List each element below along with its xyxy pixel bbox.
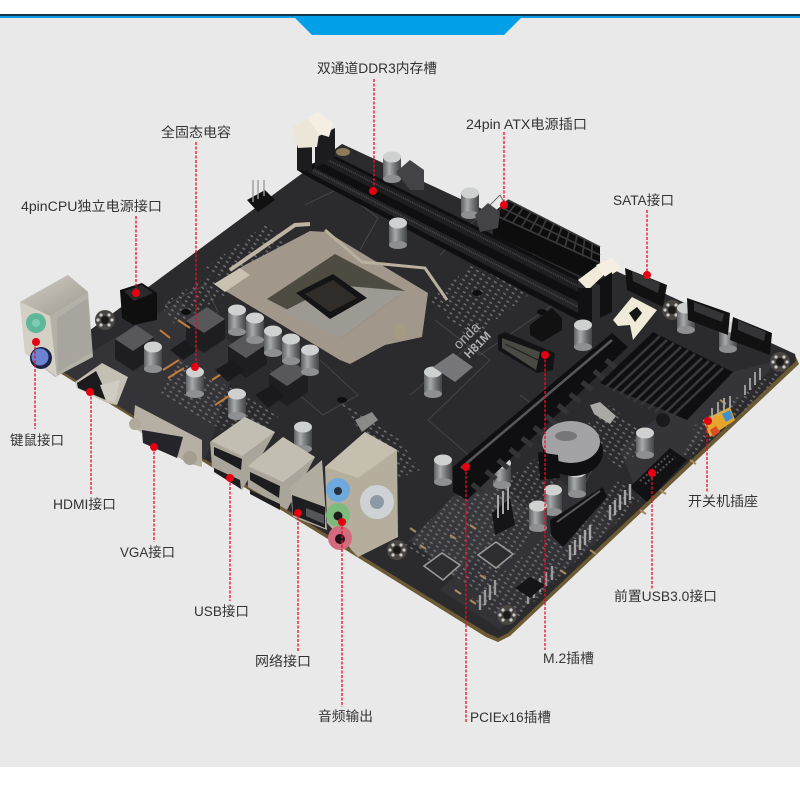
callout: audio output: 音频输出 — [318, 708, 373, 724]
chipset marking: H81M — [461, 329, 494, 361]
4-pin CPU power connector — [120, 283, 157, 325]
callout: 24pin ATX power: 24pin ATX电源插口 — [466, 117, 587, 132]
callout: USB: USB接口 — [194, 603, 249, 619]
callout: SATA: SATA接口 — [613, 192, 674, 208]
fan header pins — [247, 180, 275, 212]
small header connectors — [492, 308, 562, 535]
SATA connectors — [625, 268, 772, 355]
PCIe latch — [613, 297, 657, 340]
callout: 4pin CPU power — [21, 198, 162, 297]
callout: 24pin ATX power — [466, 117, 587, 209]
callout: power switch header: 开关机插座 — [688, 494, 758, 509]
callout: front USB3.0: 前置USB3.0接口 — [614, 588, 717, 604]
callout: M.2 slot — [541, 351, 594, 666]
VGA port — [129, 405, 202, 467]
USB ports — [210, 417, 315, 510]
chipset marking — [433, 319, 494, 382]
audio and super IO chips — [410, 400, 726, 604]
callout: HDMI — [53, 388, 116, 512]
PCIe x1 slot — [550, 487, 607, 547]
pin headers — [480, 368, 760, 610]
callout: PCIe x16 slot — [462, 463, 551, 725]
callout: power switch header — [688, 417, 758, 509]
callout: VGA — [120, 443, 175, 560]
callout: 4pin CPU power: 4pinCPU独立电源接口 — [21, 198, 162, 214]
CPU socket — [214, 224, 447, 364]
power switch header — [703, 396, 735, 437]
callout: audio output — [318, 518, 373, 724]
callout: keyboard and mouse: 键鼠接口 — [10, 432, 64, 448]
callout: dual-channel DDR3 slots: 双通道DDR3内存槽 — [317, 61, 437, 76]
callout: PCIe x16 slot: PCIEx16插槽 — [470, 710, 551, 725]
callout: USB — [194, 474, 249, 619]
callout: network: 网络接口 — [255, 653, 311, 669]
crystal oscillator — [590, 402, 616, 424]
front USB3.0 header — [630, 448, 687, 502]
HDMI port — [75, 363, 128, 405]
callout: dual-channel DDR3 slots — [317, 61, 437, 195]
callout: HDMI: HDMI接口 — [53, 496, 116, 512]
Ethernet port — [290, 460, 327, 530]
motherboard PCB — [47, 144, 799, 642]
audio jack shield — [325, 432, 398, 557]
callout: VGA: VGA接口 — [120, 544, 175, 560]
PCIe x16 slot — [453, 333, 628, 500]
M.2 slot — [498, 332, 555, 373]
mounting holes — [95, 148, 790, 625]
heatsink — [600, 332, 733, 427]
VRM chokes and capacitors — [115, 152, 737, 532]
DDR3 memory slots — [292, 112, 622, 322]
callout: SATA — [613, 192, 674, 279]
callout: solid capacitors: 全固态电容 — [161, 124, 231, 140]
24-pin ATX connector — [493, 200, 600, 285]
callout: front USB3.0 — [614, 469, 717, 604]
callout: M.2 slot: M.2插槽 — [543, 651, 594, 666]
chipset marking: onda — [450, 319, 483, 352]
callout: network — [255, 509, 311, 669]
callout: keyboard and mouse — [10, 338, 64, 448]
PCB traces — [60, 188, 780, 630]
top rule with blue tab — [0, 14, 800, 35]
PS/2 port shield — [20, 275, 93, 377]
CMOS battery — [538, 421, 603, 480]
callout: solid capacitors — [161, 124, 231, 371]
surface-mount component texture — [160, 225, 785, 625]
